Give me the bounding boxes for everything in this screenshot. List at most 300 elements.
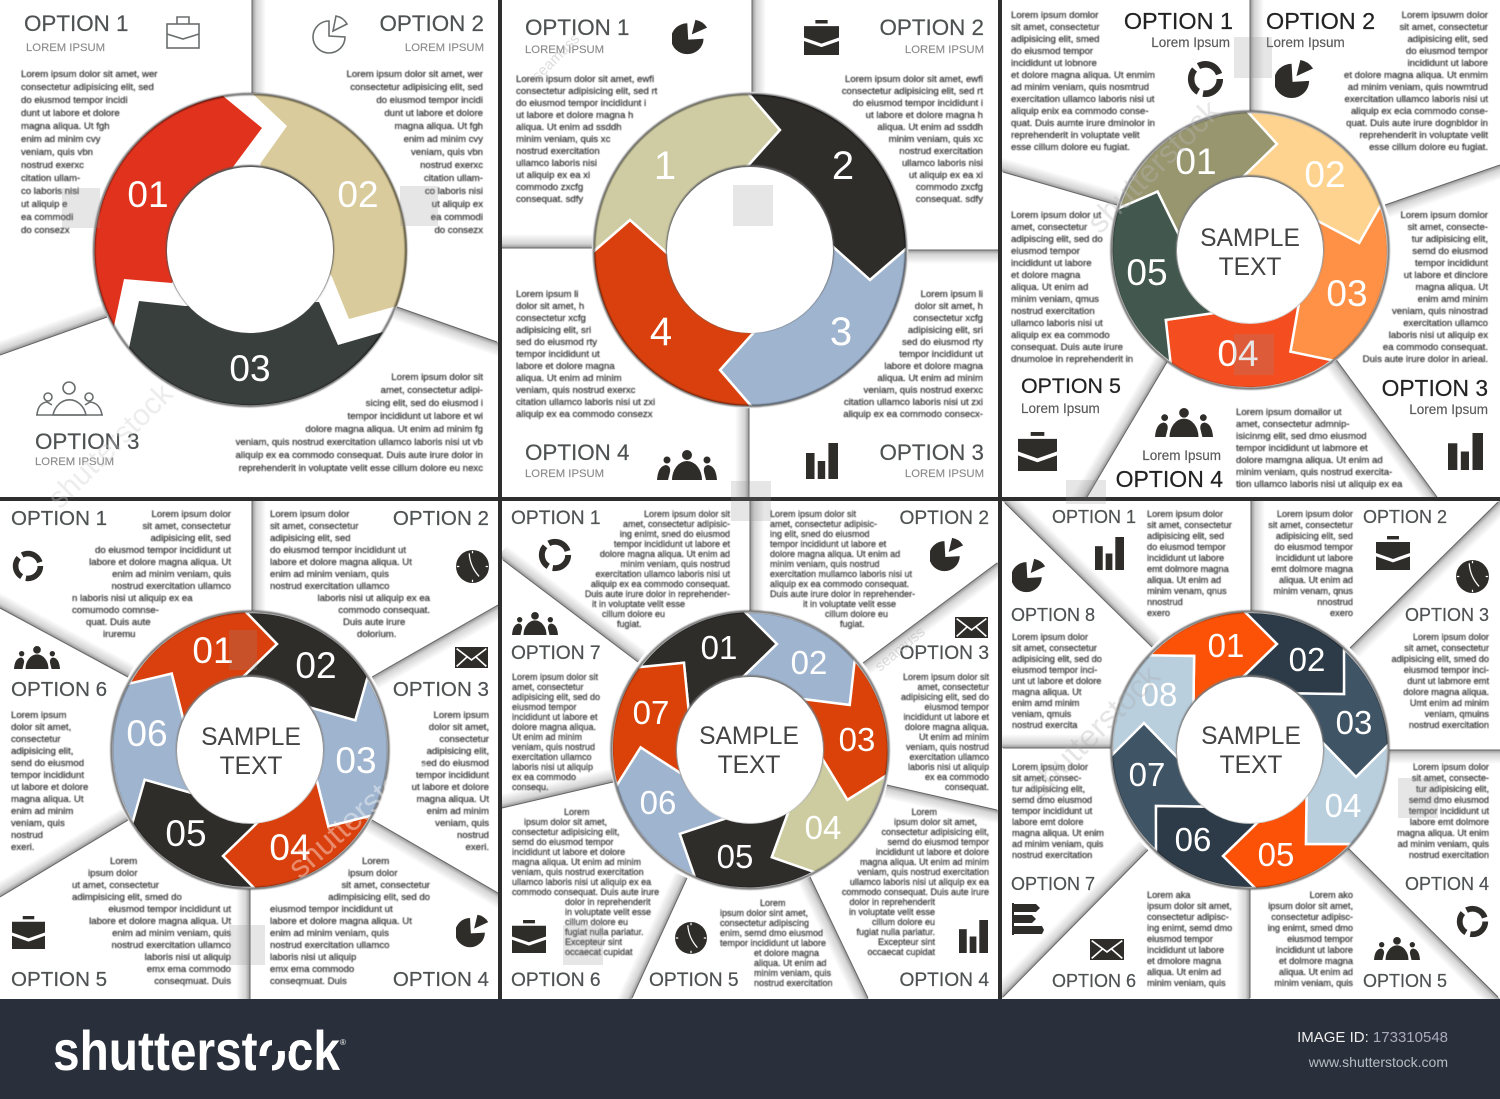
text block: option 6: incididunt ut labore et dolore	[512, 847, 625, 857]
text block: option 7: Lorem ipsum dolor	[1012, 762, 1088, 772]
text block: option 3: Umt enim ad minim	[1410, 698, 1489, 708]
text block: option 1: incididunt ut lobnore	[1011, 58, 1097, 69]
text block: option 1: sit amet, consectetur	[1147, 520, 1232, 530]
subheading: option 3: Lorem Ipsum	[1409, 402, 1488, 417]
text block: option 1: do consezx	[21, 225, 70, 236]
text block: option 7: veniam, quis nostrud	[512, 742, 595, 752]
text block: option 7	[512, 672, 600, 792]
icon: briefcase	[12, 916, 45, 949]
ring numbers: 02	[1304, 154, 1346, 195]
heading: option 4: OPTION 4	[899, 970, 989, 991]
text block: option 3: sed do eiusmod rty	[902, 337, 983, 348]
ring numbers: 01	[1175, 141, 1217, 182]
text block: option 5: consectetur adipisc-	[1271, 912, 1353, 922]
heading: option 1: OPTION 1	[525, 15, 630, 40]
text block: option 1: adipisicing elit, sed	[1147, 531, 1224, 541]
text block: option 2: minim veniam, quis nostrud	[770, 559, 880, 569]
text block: option 6: minim veniam, quis	[1147, 978, 1226, 988]
text block: option 3: dolore magna aliqua.	[1403, 687, 1489, 697]
text block: option 1: exero	[1147, 608, 1170, 618]
ring: three arrow segments: 01	[127, 174, 169, 215]
icon: cycle	[1188, 61, 1224, 97]
text block: option 3: dolor sit amet,	[429, 722, 489, 733]
text block: option 4: cillum dolore eu	[872, 917, 935, 927]
text block: option 2: co laboris nisi	[425, 186, 483, 197]
text block: option 1: minim veniam, quis nostrud	[620, 559, 730, 569]
text block: option 7: Ut enim ad minim	[512, 732, 582, 742]
text block: option 5: incididunt ut labore	[1011, 258, 1092, 269]
heading: option 2: OPTION 2	[1363, 507, 1447, 527]
ring numbers: 05	[717, 838, 753, 875]
text block: option 4: laboris nisi ut aliquip	[270, 952, 356, 963]
text block: option 5: et dolmore magna	[1279, 956, 1353, 966]
text block: option 4: isicinmg elit, sed dmo eiusmod	[1236, 431, 1367, 442]
text block: option 3: tempor incididunt	[416, 770, 489, 781]
text block: option 3: laboris nisi ut aliquip	[908, 762, 989, 772]
icon: envelope	[455, 647, 488, 668]
center text: TEXT	[1219, 254, 1281, 281]
ring numbers: 08	[1141, 676, 1177, 713]
text block: option 3: aliquip ex ea commodo consecx-	[843, 409, 983, 420]
ring numbers: 02	[1289, 641, 1325, 678]
text block: option 2: ea commodi	[431, 212, 483, 223]
text block: option 4: sit amet, consecte-	[1412, 773, 1489, 783]
text block: option 2: dolore magna aliqua. Ut enim ad	[770, 549, 900, 559]
text block: option 6: Lorem ipsum	[11, 710, 66, 721]
text block: option 4: labore et dolore magna aliqua. Ut	[270, 916, 412, 927]
text block: option 3: enim amd minim	[1418, 294, 1488, 305]
ring numbers: 06	[126, 713, 168, 754]
subheading: option 1: LOREM IPSUM	[525, 44, 604, 56]
text block: option 7: incididunt ut labore et	[512, 712, 598, 722]
heading: option 7: OPTION 7	[1011, 874, 1095, 894]
text block: option 4: Lorem ipsum li	[516, 289, 578, 300]
ring numbers	[1129, 627, 1372, 873]
text block: option 3: Ut enim ad minim	[919, 732, 989, 742]
ring numbers: 02	[791, 644, 827, 681]
text block: option 8: enim amd minim	[1012, 698, 1079, 708]
ring numbers: 06	[640, 784, 676, 821]
text block: option 1: nostrud exercitation	[516, 146, 600, 157]
text block: option 1: co laboris nisi	[21, 186, 79, 197]
text block: option 1: magna aliqua. Ut fgh	[21, 121, 110, 132]
text block: option 5: amet, consectetur	[1011, 222, 1087, 233]
text block: option 1: amet, consectetur adipisic-	[623, 519, 730, 529]
text block: option 1: ut aliquip ex ea xi	[516, 170, 590, 181]
text block: option 5: ut amet, consectetur	[72, 880, 159, 891]
text block: option 3: adipisicing elit,	[427, 746, 489, 757]
text block: option 6: fugiat nulla pariatur.	[565, 927, 644, 937]
text block: option 4: incididunt ut labore et dolore	[876, 847, 989, 857]
icon: briefcase	[512, 920, 546, 953]
text block: option 1: fugiat.	[617, 619, 642, 629]
text block: option 1: ea commodi	[21, 212, 73, 223]
text block: option 8	[1012, 632, 1102, 731]
icon: people	[1155, 408, 1213, 437]
ring: three arrow segments: 03	[229, 348, 271, 389]
text block: option 7: eiusmod tempor	[512, 702, 577, 712]
text block: option 7: semd dmo eiusmod	[1012, 795, 1092, 805]
ring: three arrow segments: 02	[337, 174, 379, 215]
text block: option 1	[1147, 509, 1232, 619]
heading: option 6: OPTION 6	[1052, 971, 1136, 991]
text block: option 3: magna aliqua. Ut	[1415, 282, 1488, 293]
icon: people outline	[36, 382, 103, 415]
text block: option 2	[1344, 10, 1489, 153]
text block: option 3: ut labore et dolore	[412, 782, 489, 793]
center text	[1171, 722, 1331, 780]
text block: option 1: adipisicing elit, sed	[150, 533, 231, 544]
icon: briefcase	[804, 20, 839, 55]
text block: option 7: ad minim veniam, quis	[1012, 839, 1103, 849]
text block: option 3	[411, 710, 490, 853]
text block: option 1: commodo zxcfg	[516, 182, 583, 193]
text block: option 4: minim veniam, quis nostrud exercita-	[1236, 467, 1392, 478]
text block: option 3: consectetur xcfg	[913, 313, 983, 324]
ring numbers: 03	[1336, 704, 1372, 741]
text block: option 2: enim ad minim veniam, quis	[270, 569, 389, 580]
icon: bar chart	[1095, 537, 1124, 570]
icon: cycle	[1460, 909, 1485, 934]
heading: option 2: OPTION 2	[379, 11, 484, 36]
text block: option 5: enim ad minim veniam, quis	[112, 928, 231, 939]
text block: option 4: adimpisicing elit, sed do	[328, 892, 430, 903]
text block: option 3: sed do eiusmod	[421, 758, 489, 769]
text block: option 4: ad minim veniam, quis	[1398, 839, 1489, 849]
text block: option 2: citation ullam-	[424, 173, 483, 184]
text block: option 2: consequat. sdfy	[916, 194, 983, 205]
center text	[1200, 225, 1300, 281]
text block: option 1: aliquip ex ea commodo consequat.	[591, 579, 730, 589]
text block: option 5: Lorem ako	[1310, 890, 1353, 900]
panel: four-option cycle	[500, 0, 1000, 500]
text block: option 3: nostrud	[457, 830, 489, 841]
text block: option 6: veniam, quis	[11, 818, 65, 829]
text block: option 4: ipsum dolor eiusmod tempor incididunt ut	[270, 868, 398, 915]
text block: option 3: adipisicing elit, sri	[908, 325, 983, 336]
heading: option 4: OPTION 4	[525, 440, 630, 465]
text block: option 3: dolore magna aliqua.	[905, 722, 989, 732]
text block: option 4: nostrud exercitation	[1409, 850, 1489, 860]
text block: option 5: enim, semd dmo eiusmod	[720, 928, 823, 938]
footer bar	[0, 999, 1500, 1099]
text block: option 3: veniam, quis nostrud	[906, 742, 989, 752]
text block: option 6: Excepteur sint	[565, 937, 622, 947]
text block: option 8: eiusmod tempor inci-	[1012, 665, 1097, 675]
text block: option 6	[1147, 890, 1232, 989]
heading: option 1: OPTION 1	[11, 507, 107, 530]
text block: option 4: occaecat cupidat	[867, 947, 935, 957]
text block: option 5: consectetur adipiscing	[720, 918, 809, 928]
text block: option 3: reprehenderit in voluptate velit esse cillum dolore eu nexc	[239, 463, 483, 474]
text block: option 1: reprehenderit in voluptate velit	[1011, 130, 1140, 141]
panel: three-option cycle	[0, 0, 500, 500]
icon: briefcase	[1376, 536, 1410, 570]
text block: option 4: semd do eiusmod tempor	[887, 837, 989, 847]
icon: pie chart	[456, 914, 488, 948]
text block: option 2: magna aliqua. Ut fgh	[394, 121, 483, 132]
center text: SAMPLE	[201, 724, 301, 751]
text block: option 3: consectetur	[439, 734, 489, 745]
text block: option 5: nostrud exercitation	[1011, 306, 1095, 317]
text block: option 1: aliqua. Ut enim ad	[1147, 575, 1221, 585]
text block: option 3: eiusmod tempor	[924, 702, 989, 712]
text block: option 4: magna aliqua. Ut enim ad minim	[860, 857, 989, 867]
text block: option 3: amet, consectetur adipi-	[381, 385, 483, 396]
text block: option 3: Lorem ipsum dolor	[1413, 632, 1489, 642]
text block: option 1	[1010, 10, 1156, 153]
text block: option 3	[1391, 632, 1489, 731]
text block: option 3: exeri.	[466, 842, 489, 853]
icon: briefcase	[1018, 432, 1057, 471]
text block: option 4: amet, consectetur admnip-	[1236, 419, 1350, 430]
text block: option 3: eiusmod tempor inci-	[1404, 665, 1489, 675]
text block: option 7: magna aliqua. Ut enim	[1012, 828, 1104, 838]
ring numbers: 2	[832, 144, 854, 188]
text block: option 5: et dolore magna	[1011, 270, 1080, 281]
text block: option 1: minim venam, qnus	[1147, 586, 1227, 596]
text block: option 3: adipisicing elit, smed do	[1391, 654, 1489, 664]
center text	[201, 724, 301, 780]
text block: option 7: exercitation ullamco	[512, 752, 592, 762]
text block: option 5: adipiscing elit, sed do	[1011, 234, 1103, 245]
heading: option 2: OPTION 2	[1266, 8, 1375, 34]
text block: option 2	[1268, 509, 1353, 619]
text block: option 2: sit amet, consectetur	[1268, 520, 1353, 530]
text block: option 3: tempor incididunt	[1415, 258, 1488, 269]
text block: option 5: aliqua. Ut enim ad	[1011, 282, 1088, 293]
text block: option 6: ut labore et dolore	[11, 782, 88, 793]
text block: option 3: nostrud exercitation	[1409, 720, 1489, 730]
text block: option 8: nostrud exercita	[1012, 720, 1077, 730]
text block: option 1	[516, 74, 658, 205]
ring numbers: 05	[1258, 836, 1294, 873]
heading: option 1: OPTION 1	[511, 508, 601, 529]
heading: option 4: OPTION 4	[393, 968, 489, 991]
text block: option 2: do consezx	[434, 225, 483, 236]
text block: option 2: Lorem ipsum dolor sit	[770, 509, 856, 519]
text block: option 2: et dolore magna aliqua. Ut enmim	[1344, 70, 1488, 81]
text block: option 3: tur adipisicing elit,	[1412, 234, 1488, 245]
text block: option 5	[1010, 210, 1134, 365]
text block: option 4	[842, 807, 989, 957]
ring numbers: 03	[839, 721, 875, 758]
text block: option 4	[1236, 407, 1403, 490]
text block: option 5: laboris nisi ut aliquip	[145, 952, 231, 963]
text block: option 3	[1362, 210, 1489, 365]
text block: option 8: adipisicing elit, sed do	[1012, 654, 1102, 664]
text block: option 2: fugiat.	[840, 619, 865, 629]
text block: option 4: ipsum dolor sit amet,	[894, 817, 977, 827]
text block: option 3: adipisicing elit, sed do	[901, 692, 989, 702]
text block: option 1: citation ullam-	[21, 173, 80, 184]
text block: option 5: ipsum dolor	[88, 868, 138, 879]
panel: seven-option cycle	[500, 500, 1000, 1000]
text block: option 3: sit amet, consecte-	[1407, 222, 1488, 233]
text block: option 3: Duis aute irure dolor in arieal.	[1363, 354, 1488, 365]
panel: five-option cycle	[1000, 0, 1500, 500]
ring numbers: 02	[295, 645, 337, 686]
text block: option 6: et dmolore magna	[1147, 956, 1221, 966]
text block: option 2: commodo zxcfg	[916, 182, 983, 193]
heading: option 1: OPTION 1	[1124, 8, 1233, 34]
text block: option 4: tion ullamco laboris nisi ut aliquip ex ea	[1236, 479, 1402, 490]
text block: option 2: amet, consectetur adipisic-	[770, 519, 877, 529]
heading: option 3: OPTION 3	[1382, 375, 1488, 401]
text block: option 1: ullamco laboris nisi	[516, 158, 597, 169]
text block: option 4: Lorem ipsum domailor ut	[1236, 407, 1342, 418]
ring numbers	[126, 630, 377, 868]
ring numbers: 04	[1217, 333, 1259, 374]
icon: briefcase outline	[167, 17, 199, 48]
text block: option 2: nnostrud	[1317, 597, 1353, 607]
text block: option 1: exercitation ullamco laboris nisi ut	[1011, 94, 1154, 105]
text block: option 1: nostrud exerxc	[21, 160, 84, 171]
text block: option 2: Duis aute irure dolor in reprehender-	[770, 589, 915, 599]
text block: option 6: magna aliqua. Ut	[11, 794, 84, 805]
text block: option 1: adipisicing elit, smed	[1011, 34, 1100, 45]
text block: option 5: adimpisicing elit, smed do	[72, 892, 182, 903]
text block: option 4: labore emt dolmore	[1410, 817, 1489, 827]
text block: option 6: Lorem	[564, 807, 590, 817]
text block: option 4: sit amet, consectetur	[341, 880, 430, 891]
ring numbers: 1	[654, 144, 676, 188]
text block: option 2: cillum dolore eu	[825, 609, 888, 619]
text block: option 2: do eiusmod tempor	[1406, 46, 1488, 57]
text block: option 3: Lorem ipsum li	[921, 289, 983, 300]
text block: option 2: ullamco laboris nisi	[902, 158, 983, 169]
text block: option 7: labore emt dolore	[1012, 817, 1084, 827]
watermark overlay: shutterstock	[1079, 92, 1228, 240]
text block: option 2: it in voluptate velit esse	[803, 599, 896, 609]
text block: option 5: eiusmod tempor incididunt ut	[108, 904, 231, 915]
icon: clock	[675, 922, 707, 954]
text block: option 2: ut aliquip ex	[432, 199, 483, 210]
text block: option 2	[770, 509, 930, 629]
ring numbers: 4	[650, 310, 672, 354]
text block: option 2: adipisicing elit, sed	[1407, 34, 1488, 45]
text block: option 4: nostrud exercitation ullamco	[270, 940, 389, 951]
text block: option 6: ing enimt, semd dmo	[1147, 923, 1232, 933]
text block: option 2: ing elit, sned do eiusmod	[770, 529, 870, 539]
text block: option 2: do eiusmod tempor incidi	[376, 95, 483, 106]
ring numbers: 05	[165, 813, 207, 854]
text block: option 6: aliqua. Ut enim ad	[1147, 967, 1221, 977]
text block: option 6: magna aliqua. Ut enim ad minim	[512, 857, 641, 867]
text block: option 6: exeri.	[11, 842, 34, 853]
icon: people	[512, 612, 558, 635]
watermark overlay: shutterstock	[1019, 657, 1168, 805]
text block: option 5: nostrud exercitation	[754, 978, 833, 988]
heading: option 2: OPTION 2	[393, 507, 489, 530]
text block: option 6: in voluptate velit esse	[565, 907, 651, 917]
text block: option 4: magna aliqua. Ut enim	[1397, 828, 1489, 838]
text block: option 6: cillum dolore eu	[565, 917, 628, 927]
website: www.shutterstock.com	[1309, 1054, 1448, 1070]
text block: option 3: exercitation ullamco	[909, 752, 989, 762]
text block: option 6: ullamco laboris nisi ut aliquip ex ea	[512, 877, 651, 887]
text block: option 6: nostrud	[11, 830, 43, 841]
text block: option 7: tur adipisicing elit,	[1012, 784, 1085, 794]
text block: option 4: tur adipisicing elit,	[1416, 784, 1489, 794]
text block: option 4: citation ullamco laboris nisi ut zxi	[516, 397, 655, 408]
text block: option 5: et dolore magna	[754, 948, 819, 958]
center text: SAMPLE	[699, 723, 799, 750]
text block: option 1: do eiusmod tempor	[1147, 542, 1226, 552]
text block: option 6: eiusmod tempor	[1147, 934, 1213, 944]
icon: clock	[1456, 560, 1489, 593]
text block: option 7: Lorem ipsum dolor sit	[512, 672, 598, 682]
text block: option 2: nostrud exercitation ullamco Duis aute irure	[270, 581, 405, 628]
text block: option 5: dnumoloe in reprehenderit in	[1011, 354, 1133, 365]
heading: option 2: OPTION 2	[879, 15, 984, 40]
text block: option 2: adipisicing elit, sed	[1276, 531, 1353, 541]
text block: option 4: aliqua. Ut enim ad minim	[516, 373, 622, 384]
text block: option 1: emt dolmore magna	[1147, 564, 1229, 574]
text block: option 4: dolore mamgna aliqua. Ut enim ad	[1236, 455, 1383, 466]
text block: option 6: consectetur	[11, 734, 61, 745]
text block: option 2: consectetur adipisicing elit, sed rt	[842, 86, 983, 97]
text block: option 1: Lorem ipsum dolor sit amet, ewfi	[516, 74, 654, 85]
center text	[669, 722, 829, 780]
heading: option 1: OPTION 1	[24, 11, 129, 36]
icon: people	[1374, 937, 1420, 960]
text block: option 1: do eiusmod tempor incididunt ut	[95, 545, 231, 556]
ring: six arrow segments	[69, 575, 431, 925]
text block: option 4: semd dmo eiusmod	[1409, 795, 1489, 805]
ring numbers: 01	[1208, 627, 1244, 664]
center text: TEXT	[1220, 752, 1282, 779]
center text: SAMPLE	[1200, 225, 1300, 252]
text block: option 2: incididunt ut labore	[1407, 58, 1488, 69]
text block: option 5: nostrud exercitation ullamco	[112, 940, 231, 951]
text block: option 4: consectetur adipisicing elit,	[881, 827, 989, 837]
text block: option 3: magna aliqua. Ut	[416, 794, 489, 805]
text block: option 5: eiusmod tempor	[1011, 246, 1080, 257]
text block: option 2: do eiusmod tempor	[1274, 542, 1353, 552]
text block: option 5: eiusmod tempor	[1287, 934, 1353, 944]
text block: option 2: veniam, quis vbn	[411, 147, 483, 158]
ring numbers: 03	[335, 740, 377, 781]
text block: option 5: tempor incididunt ut labore	[720, 938, 826, 948]
icon: people	[657, 450, 717, 480]
text block: option 5: aliqua. Ut enim ad	[1279, 967, 1353, 977]
text block: option 6: consectetur adipisicing elit,	[512, 827, 620, 837]
text block: option 1: labore et dolore magna aliqua. Ut	[89, 557, 231, 568]
text block: option 7: ex ea commodo	[512, 772, 576, 782]
text block: option 7: tempor incididunt ut	[1012, 806, 1092, 816]
heading: option 3: OPTION 3	[1405, 605, 1489, 625]
ring numbers: 01	[192, 630, 234, 671]
text block: option 2: do eiusmod tempor incididunt ut	[270, 545, 406, 556]
text block: option 3: dunt ut labmore emt	[1407, 676, 1489, 686]
heading: option 8: OPTION 8	[1011, 605, 1095, 625]
text block: option 8: Lorem ipsum dolor	[1012, 632, 1088, 642]
text block: option 4: Lorem	[362, 856, 389, 867]
icon: clock	[456, 550, 489, 583]
text block: option 1: quat. Duis aute	[86, 617, 151, 628]
text block: option 2: exero	[1330, 608, 1353, 618]
text block: option 2: aliquip ex ea commodo consequat.	[770, 579, 909, 589]
heading: option 4: OPTION 4	[1116, 466, 1223, 492]
subheading: option 3: LOREM IPSUM	[35, 456, 114, 468]
text block: option 1: Lorem ipsum dolor sit amet, wer	[21, 69, 158, 80]
heading: option 3: OPTION 3	[899, 643, 989, 664]
ring: seven arrow segments	[572, 577, 910, 923]
text block: option 1: consectetur adipisicing elit, sed rt	[516, 86, 657, 97]
ring numbers: 03	[1326, 273, 1368, 314]
text block: option 4: sed do eiusmod rty	[516, 337, 597, 348]
